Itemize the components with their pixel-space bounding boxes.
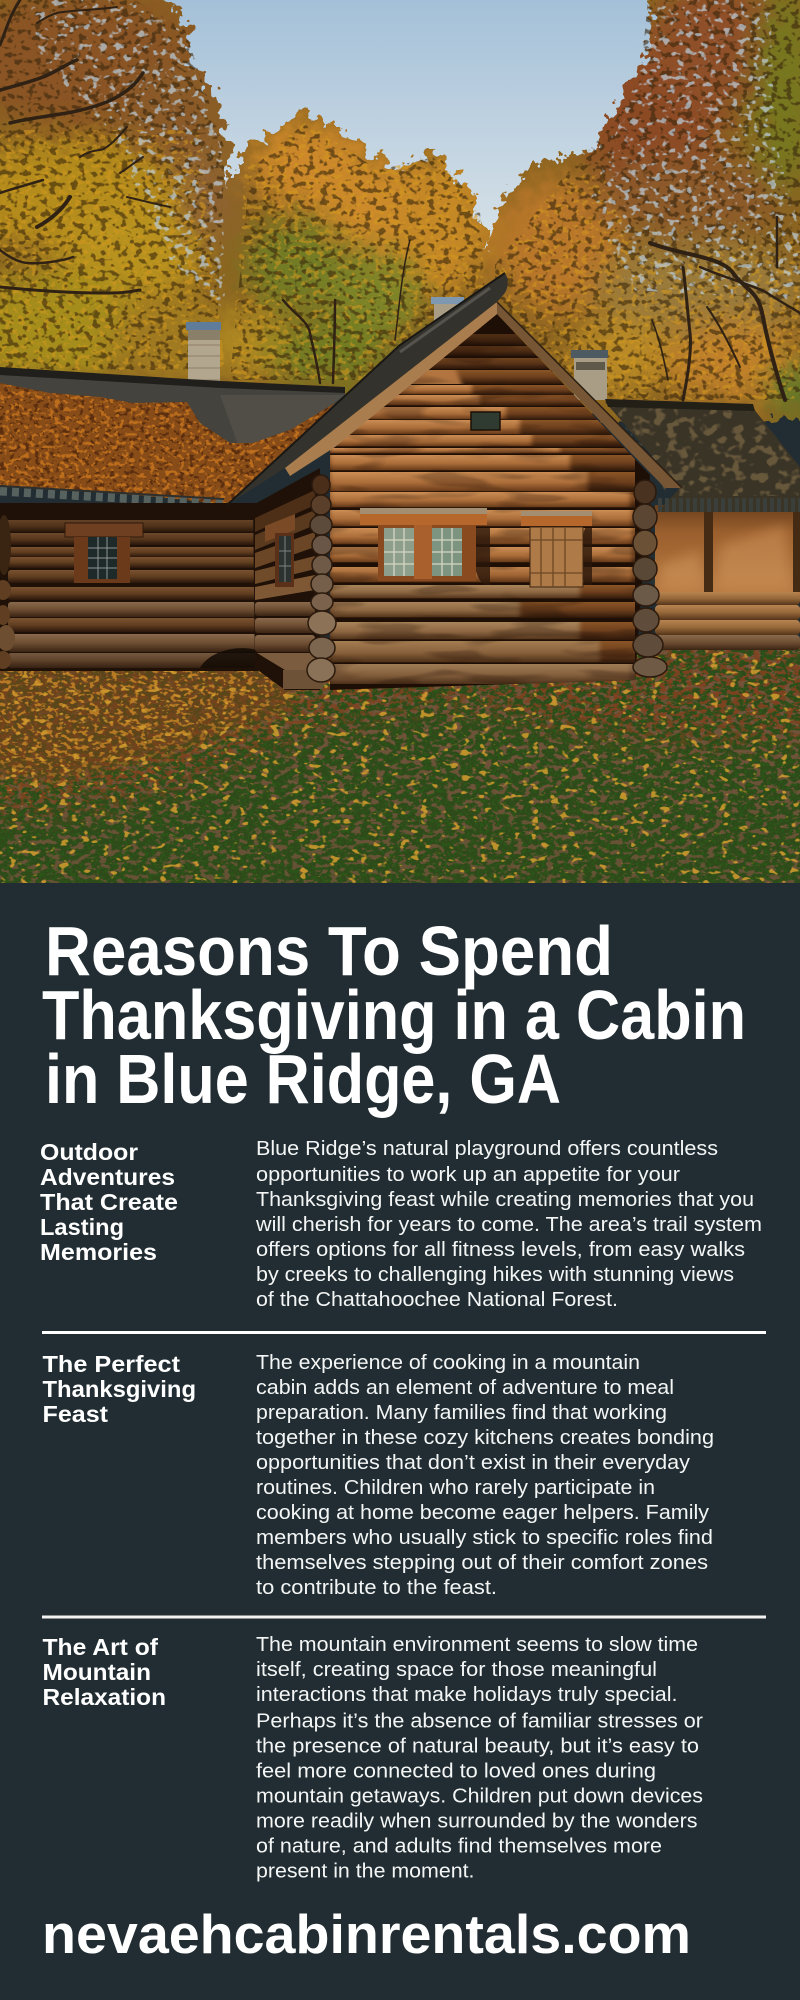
heading: outdoor adventures: Outdoor <box>40 1139 138 1165</box>
body text: outdoor adventures: will cherish for years to come. The area’s trail system <box>255 1214 762 1236</box>
sky <box>163 0 658 252</box>
section: mountain relaxation <box>42 1634 703 1882</box>
section: thanksgiving feast <box>42 1351 714 1599</box>
left wing window <box>65 523 143 583</box>
side wall window <box>265 514 295 587</box>
body text: mountain relaxation: itself, creating space for those meaningful <box>256 1659 657 1681</box>
chimneys <box>186 297 608 404</box>
foliage shadows <box>0 0 800 400</box>
body text: thanksgiving feast: opportunities that don’t exist in their everyday <box>256 1452 690 1474</box>
sky gaps through canopy <box>30 0 800 310</box>
body text: mountain relaxation: Perhaps it’s the absence of familiar stresses or <box>256 1710 703 1732</box>
title: Reasons To Spend <box>45 912 613 990</box>
gable roof <box>227 273 682 505</box>
right wing roof <box>605 399 800 512</box>
body text: mountain relaxation: mountain getaways. Children put down devices <box>256 1786 703 1808</box>
corner log ends <box>307 475 667 682</box>
body text: thanksgiving feast: themselves stepping out of their comfort zones <box>256 1552 708 1574</box>
body text: thanksgiving feast: cooking at home become eager helpers. Family <box>256 1502 709 1524</box>
body text: thanksgiving feast: to contribute to the feast. <box>256 1577 497 1599</box>
sunlit logs <box>330 370 632 684</box>
body text: mountain relaxation: interactions that make holidays truly special. <box>256 1684 678 1706</box>
left wing wall <box>0 503 258 671</box>
autumn trees <box>0 0 800 420</box>
heading: outdoor adventures: Memories <box>40 1239 157 1265</box>
centre wing side wall <box>253 468 323 690</box>
heading: outdoor adventures: That Create <box>40 1189 178 1215</box>
body text: thanksgiving feast: cabin adds an element of adventure to meal <box>256 1377 674 1399</box>
title <box>42 912 746 1118</box>
body text: thanksgiving feast <box>256 1352 714 1599</box>
left wing roof <box>0 367 345 505</box>
heading: mountain relaxation <box>42 1634 166 1710</box>
body text: mountain relaxation: of nature, and adults find themselves more <box>256 1836 662 1858</box>
body text: outdoor adventures: by creeks to challenging hikes with stunning views <box>256 1264 734 1286</box>
body text: thanksgiving feast: The experience of cooking in a mountain <box>256 1352 640 1374</box>
body text: outdoor adventures: offers options for all fitness levels, from easy walks <box>256 1239 745 1261</box>
leaf-covered roof <box>0 383 335 505</box>
main windows with shutter <box>360 508 592 587</box>
body text: outdoor adventures: of the Chattahoochee National Forest. <box>256 1289 618 1311</box>
body text: mountain relaxation: more readily when surrounded by the wonders <box>256 1810 698 1832</box>
body text: thanksgiving feast: preparation. Many families find that working <box>256 1402 667 1424</box>
heading: mountain relaxation: Mountain <box>42 1659 151 1685</box>
main gable wall <box>330 314 650 690</box>
heading: outdoor adventures: Lasting <box>40 1214 124 1240</box>
body text: mountain relaxation: present in the moment. <box>256 1860 474 1882</box>
foliage highlights <box>0 122 800 400</box>
footer website url: nevaehcabinrentals.com <box>42 1903 691 1965</box>
gable vent window <box>471 412 500 430</box>
body text: outdoor adventures: opportunities to work up an appetite for your <box>256 1164 680 1186</box>
heading: mountain relaxation: The Art of <box>42 1634 158 1660</box>
body text: thanksgiving feast: routines. Children who rarely participate in <box>256 1477 655 1499</box>
body text: mountain relaxation: The mountain environment seems to slow time <box>256 1634 698 1656</box>
body text: outdoor adventures: Thanksgiving feast while creating memories that you <box>256 1189 754 1211</box>
section: outdoor adventures <box>40 1138 762 1311</box>
body text: mountain relaxation: the presence of natural beauty, but it’s easy to <box>256 1736 699 1758</box>
heading: mountain relaxation: Relaxation <box>42 1684 166 1710</box>
hero photo: log cabin in autumn forest <box>0 0 800 940</box>
heading: outdoor adventures <box>40 1139 178 1265</box>
heading: outdoor adventures: Adventures <box>40 1164 175 1190</box>
branches and trunks <box>0 0 800 400</box>
title: in Blue Ridge, GA <box>45 1040 561 1118</box>
body text: outdoor adventures <box>255 1138 762 1311</box>
heading: thanksgiving feast: Thanksgiving <box>42 1376 196 1402</box>
body text: thanksgiving feast: members who usually stick to specific roles find <box>256 1527 713 1549</box>
heading: thanksgiving feast <box>42 1351 196 1427</box>
body text: thanksgiving feast: together in these cozy kitchens creates bonding <box>256 1427 714 1449</box>
right wing wall <box>655 505 800 650</box>
body text: mountain relaxation: feel more connected to loved ones during <box>256 1760 656 1782</box>
heading: thanksgiving feast: Feast <box>42 1401 108 1427</box>
body text: mountain relaxation <box>256 1634 703 1882</box>
body text: outdoor adventures: Blue Ridge’s natural playground offers countless <box>256 1138 718 1160</box>
ground with fallen leaves <box>0 646 800 883</box>
heading: thanksgiving feast: The Perfect <box>42 1351 180 1377</box>
